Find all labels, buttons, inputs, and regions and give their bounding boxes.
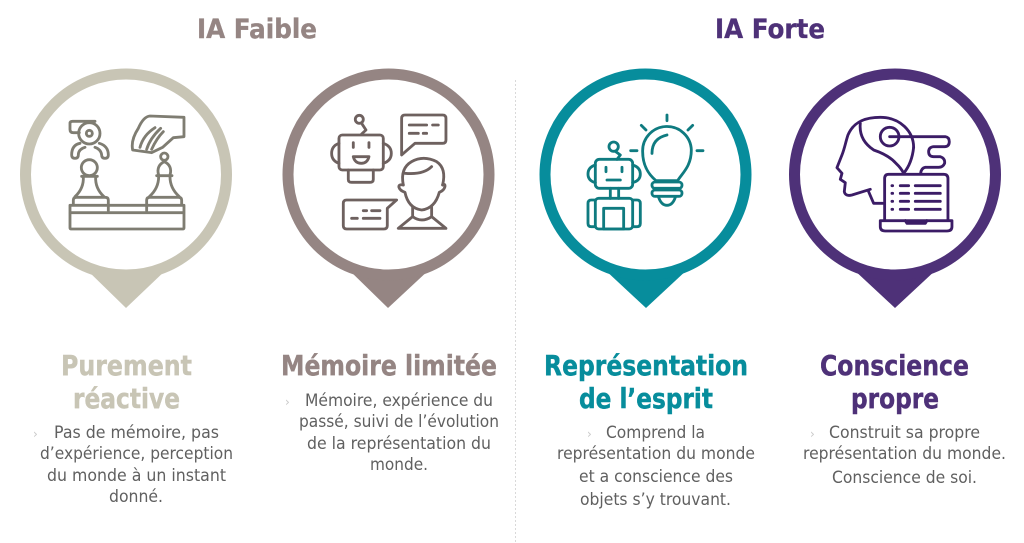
title: Conscience propre: propre: [851, 382, 939, 415]
heading: IA Faible: IA Faible: [197, 14, 317, 45]
pin marker: purement réactive: [26, 74, 226, 308]
heading: IA Forte: IA Forte: [715, 14, 825, 45]
text: description mémoire limitée: [285, 391, 499, 475]
text: description purement réactive: [33, 423, 233, 507]
icon: AI head and laptop: [837, 117, 952, 231]
title: Conscience propre: Conscience: [820, 349, 969, 382]
text: description mémoire limitée: monde.: [370, 455, 428, 475]
pin marker: représentation de l'esprit: [545, 74, 746, 308]
title: Mémoire limitée: Mémoire limitée: [281, 349, 497, 382]
panel: mémoire limitée: [281, 74, 499, 475]
text: description purement réactive: ›: [33, 427, 38, 441]
text: description représentation de l'esprit: représentation du monde: [557, 444, 755, 464]
text: description mémoire limitée: de la représentation du: [307, 434, 491, 454]
text: description purement réactive: du monde à un instant: [47, 466, 226, 486]
title: Représentation de l'esprit: de l’esprit: [579, 382, 713, 415]
text: description conscience propre: Construit sa propre: [829, 423, 980, 443]
text: description mémoire limitée: passé, suivi de l’évolution: [299, 412, 499, 432]
panel: représentation de l'esprit: [544, 74, 755, 510]
text: description représentation de l'esprit: et a conscience des: [579, 467, 733, 487]
text: description mémoire limitée: Mémoire, expérience du: [305, 391, 493, 411]
text: description représentation de l'esprit: Comprend la: [606, 423, 705, 443]
text: description conscience propre: [803, 423, 1006, 488]
text: description représentation de l'esprit: ›: [587, 427, 592, 441]
pin marker: conscience propre: [794, 74, 996, 308]
panel: conscience propre: [794, 74, 1006, 488]
panel: purement réactive: [26, 74, 233, 507]
text: description représentation de l'esprit: [557, 423, 755, 510]
text: description conscience propre: Conscience de soi.: [832, 468, 977, 488]
title: Conscience propre: [820, 349, 969, 415]
title: Purement réactive: Purement: [61, 349, 192, 382]
title: Purement réactive: [61, 349, 192, 415]
pin marker: mémoire limitée: [288, 74, 489, 308]
title: Représentation de l'esprit: [544, 349, 748, 415]
text: description mémoire limitée: ›: [285, 395, 290, 409]
icon: chess robot and hand: [70, 116, 184, 229]
text: description purement réactive: d’expérience, perception: [40, 444, 233, 464]
text: description conscience propre: ›: [810, 427, 815, 441]
title: Représentation de l'esprit: Représentation: [544, 349, 748, 382]
icon: robot and light bulb: [588, 115, 703, 229]
title: Purement réactive: réactive: [73, 382, 180, 415]
text: description purement réactive: donné.: [109, 487, 163, 507]
text: description conscience propre: représentation du monde.: [803, 444, 1006, 464]
icon: robot and person conversation: [332, 115, 446, 229]
text: description représentation de l'esprit: objets s’y trouvant.: [580, 490, 731, 510]
text: description purement réactive: Pas de mémoire, pas: [54, 423, 219, 443]
